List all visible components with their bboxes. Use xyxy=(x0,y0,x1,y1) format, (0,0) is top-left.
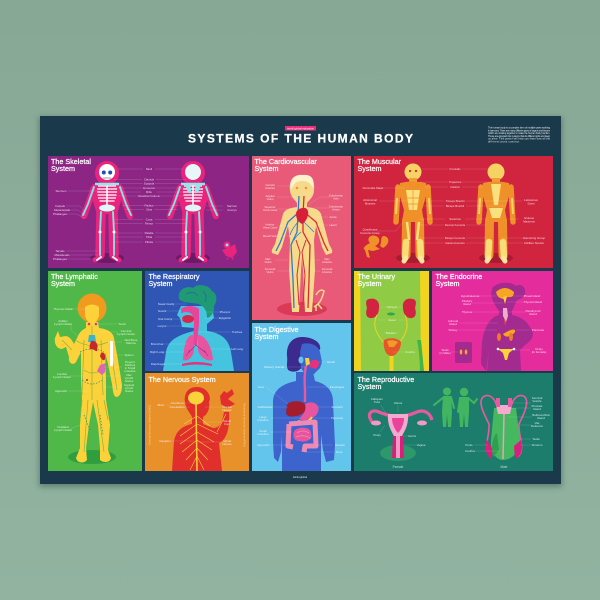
nervous leader lines xyxy=(166,403,222,442)
muscular labels: Latissimus xyxy=(524,198,538,202)
cardiovascular labels: Veins xyxy=(264,260,272,264)
cardiovascular labels: Inferior xyxy=(266,222,275,226)
muscular labels: Deltoid xyxy=(450,185,460,189)
reproductive labels: Female xyxy=(393,465,404,469)
lymphatic labels: Iliac xyxy=(126,373,132,377)
heading: respiratory: The Respiratory xyxy=(148,272,200,281)
skeletal labels: Fibula xyxy=(145,240,153,244)
endocrine labels xyxy=(439,294,546,355)
cardiovascular labels: Subclavian xyxy=(329,204,343,208)
reproductive labels: Gland xyxy=(533,407,541,411)
muscular labels: Femoris Group xyxy=(360,231,380,235)
cardiovascular labels: Artery xyxy=(332,208,340,212)
heading: urinary: The Urinary xyxy=(358,272,395,281)
nervous labels: Ganglion xyxy=(159,439,171,443)
heading: muscular: The Muscular xyxy=(358,157,401,166)
muscular leader lines xyxy=(377,169,523,243)
muscular labels: Abdominal xyxy=(363,198,377,202)
urinary labels xyxy=(386,305,415,354)
panel: muscular system xyxy=(354,156,553,268)
skeletal labels: Ribs xyxy=(146,190,152,194)
respiratory labels: Right Lung xyxy=(150,350,164,354)
lymphatic labels: Tonsil xyxy=(118,322,126,326)
heading: urinary: System xyxy=(358,279,381,288)
urinary labels: Bladder xyxy=(386,331,396,335)
skeletal labels: Radius xyxy=(144,204,154,208)
heading: digestive: The Digestive xyxy=(254,325,298,334)
intro paragraph: different parts connect. xyxy=(488,140,520,144)
endocrine labels: Thyroid Gland xyxy=(524,300,542,304)
lymphatic labels: in Small xyxy=(125,366,135,370)
reproductive labels: Tube xyxy=(374,400,381,404)
heading: cardiovascular: System xyxy=(254,164,278,173)
endocrine labels: Gland xyxy=(449,322,457,326)
lymphatic labels: Marrow xyxy=(126,341,137,345)
skeleton figures xyxy=(83,161,217,263)
lymphatic labels: Nodes xyxy=(125,389,134,393)
cardiovascular labels: Veins xyxy=(266,197,274,201)
lymphatic leader lines xyxy=(68,309,123,429)
heading: digestive: System xyxy=(254,332,278,341)
cardiovascular labels: Subclavian xyxy=(329,194,343,198)
lymphatic labels: Appendix xyxy=(55,389,68,393)
lymphatic labels: Spleen xyxy=(124,353,134,357)
muscular labels: Hamstring Group xyxy=(523,236,545,240)
skeletal labels: Phalanges xyxy=(53,212,67,216)
muscular labels: Frontalis xyxy=(449,167,461,171)
reproductive labels: Cervix xyxy=(408,434,417,438)
heading: skeletal: System xyxy=(51,164,75,173)
panel: endocrine system xyxy=(432,271,553,371)
lymphatic labels: Axillary xyxy=(58,319,68,323)
skeletal labels: Coccyx xyxy=(227,208,237,212)
figure: endocrine body xyxy=(481,283,533,371)
skeletal labels: Sternum xyxy=(56,189,67,193)
digestive labels: Salivary Glands xyxy=(264,365,285,369)
muscular labels: Sartorius xyxy=(449,217,461,221)
organs: kidneys and bladder xyxy=(366,299,416,356)
diagram: male reproductive organs xyxy=(481,395,527,460)
skeletal labels: Femur xyxy=(145,221,153,225)
digestive labels: Intestine xyxy=(258,418,269,422)
footer publisher note: twinkl.global xyxy=(293,475,307,479)
cardiovascular labels: Renal Vein xyxy=(263,234,277,238)
digestive labels: Small xyxy=(259,429,267,433)
muscular labels: Gastrocnemius xyxy=(445,241,465,245)
skeletal labels: Tarsals xyxy=(55,249,65,253)
reproductive labels: Scrotum xyxy=(532,443,543,447)
muscular labels: Trapezius xyxy=(449,180,462,184)
muscular labels xyxy=(360,167,545,245)
digestive leader lines xyxy=(266,362,333,452)
reproductive labels: Penis xyxy=(465,443,473,447)
respiratory labels: Diaphragm xyxy=(151,362,166,366)
cardiovascular labels: Aorta xyxy=(330,215,337,219)
skeletal labels: Sacrum xyxy=(227,204,238,208)
lymphatic labels: Peyer's xyxy=(125,360,135,364)
digestive labels: Mouth xyxy=(327,360,335,364)
lymphatic labels: Lymph Nodes xyxy=(53,375,71,379)
nervous labels: Cranial xyxy=(222,405,232,409)
urinary labels: Urethra xyxy=(405,350,415,354)
lymphatic labels: Lymph Nodes xyxy=(54,322,72,326)
endocrine leader lines xyxy=(451,296,530,352)
endocrine labels: (in Female) xyxy=(532,350,546,354)
cardiovascular labels: Femoral xyxy=(265,267,276,271)
reproductive labels: Fallopian xyxy=(371,397,383,401)
muscular labels: Biceps Femoris xyxy=(445,236,466,240)
figure: body with vessels xyxy=(272,175,332,316)
lymphatic labels xyxy=(53,307,138,432)
respiratory labels: Pharynx xyxy=(220,310,231,314)
digestive labels: Rectum xyxy=(335,443,346,447)
muscular labels: Muscles xyxy=(365,202,376,206)
icon: red dragon on hand xyxy=(220,389,235,408)
skeletal labels: Clavicle xyxy=(144,178,154,182)
figure: respiratory torso xyxy=(163,285,234,371)
respiratory labels: Nostril xyxy=(158,309,166,313)
skeletal labels: Ulna xyxy=(146,208,152,212)
nervous labels: Spinal xyxy=(223,439,231,443)
heading: skeletal: The Skeletal xyxy=(51,157,91,166)
reproductive labels xyxy=(371,396,550,469)
icon: dragon skeleton figure xyxy=(314,290,324,311)
panel: urinary system xyxy=(354,271,429,371)
muscular labels: Dorsi xyxy=(528,202,535,206)
heading: nervous: The Nervous System xyxy=(148,375,216,384)
skeletal labels: Coxa xyxy=(146,218,153,222)
panel: digestive system xyxy=(252,323,351,471)
nervous labels: Cerebrum xyxy=(171,401,184,405)
cardiovascular labels: Superior xyxy=(265,205,275,209)
endocrine labels: Thymus xyxy=(462,310,473,314)
endocrine labels: Parathyroid xyxy=(526,309,541,313)
heading: endocrine: The Endocrine xyxy=(436,272,482,281)
lymphatic labels: Thymus Gland xyxy=(54,307,73,311)
cardiovascular labels xyxy=(263,183,343,274)
skeletal labels: Metacarpals xyxy=(54,208,70,212)
skeletal labels: Scapula xyxy=(144,182,155,186)
muscular labels: Achilles Tendon xyxy=(524,241,544,245)
figure: nervous system xyxy=(172,387,229,471)
respiratory labels: Trachea xyxy=(232,330,243,334)
cardiovascular labels: Iliac xyxy=(324,257,330,261)
intro paragraph: The human body is a complex form of multiple parts working xyxy=(488,126,551,130)
skeletal labels: Vertebral Column xyxy=(138,194,161,198)
reproductive labels: Urethra xyxy=(465,449,475,453)
skeletal leader lines xyxy=(66,169,223,259)
muscular labels: Biceps Brachii xyxy=(446,204,465,208)
intro paragraph: in harmony. There are many different types of organs and tissues xyxy=(488,129,551,132)
heading: endocrine: System xyxy=(436,279,459,288)
reproductive labels: Ovary xyxy=(373,433,381,437)
publisher tag: twinkl.global.education xyxy=(287,126,315,130)
nervous labels: Nerves xyxy=(222,408,232,412)
digestive labels: Stomach xyxy=(331,405,343,409)
endocrine labels: Testis xyxy=(441,348,449,352)
endocrine labels: (in Male) xyxy=(439,351,451,355)
poster shadow xyxy=(39,117,562,487)
reproductive leader lines xyxy=(380,403,532,451)
heading: reproductive: System xyxy=(358,382,381,391)
respiratory labels: Oral Cavity xyxy=(158,317,173,321)
reproductive labels: Vagina xyxy=(417,443,426,447)
respiratory labels: Epiglottis xyxy=(219,316,231,320)
skeletal labels: Skull xyxy=(146,167,152,171)
skeletal labels: Phalanges xyxy=(53,257,67,261)
cardiovascular labels: Vena Cava xyxy=(263,208,277,212)
title: SYSTEMS OF THE HUMAN BODY xyxy=(188,132,413,146)
poster board xyxy=(40,116,561,484)
reproductive labels: Male xyxy=(501,465,508,469)
cardiovascular labels: Femoral xyxy=(322,267,333,271)
skeletal labels: Humerus xyxy=(143,186,155,190)
cardiovascular labels: Vein xyxy=(333,196,339,200)
icon: bird skeleton xyxy=(222,242,237,260)
nervous labels: Nerves xyxy=(222,442,232,446)
diagram: female reproductive organs xyxy=(370,411,432,461)
skeletal labels: Patella xyxy=(145,231,154,235)
panel: reproductive system xyxy=(354,373,553,471)
lymphatic labels: Inguinal xyxy=(124,383,134,387)
nervous labels: Cerebellum xyxy=(170,405,185,409)
digestive labels: Intestine xyxy=(258,432,269,436)
digestive labels xyxy=(257,360,346,454)
digestive labels: Liver xyxy=(258,385,264,389)
intro paragraph: us alive. This poster will help you learn how all the xyxy=(488,138,551,141)
endocrine labels: Gland xyxy=(529,312,537,316)
respiratory labels: Bronchus xyxy=(151,342,164,346)
digestive labels: Esophagus xyxy=(330,385,345,389)
digestive labels: Gallbladder xyxy=(258,405,272,409)
reproductive labels: Seminal xyxy=(532,396,543,400)
cardiovascular labels: Vena Cava xyxy=(263,226,277,230)
skeletal labels: Carpals xyxy=(55,204,66,208)
cardiovascular labels: Arteries xyxy=(265,186,276,190)
cardiovascular labels: Arteries xyxy=(322,270,333,274)
heading: respiratory: System xyxy=(148,279,172,288)
endocrine labels: Kidney xyxy=(449,328,458,332)
cardiovascular labels: Carotid xyxy=(265,183,275,187)
nervous labels: Brain xyxy=(158,403,165,407)
nervous labels: Cord xyxy=(224,422,231,426)
reproductive labels: Uterus xyxy=(394,401,403,405)
endocrine labels: Adrenal xyxy=(448,319,458,323)
inset: male testes xyxy=(455,342,472,363)
icons: two green figures xyxy=(434,388,477,427)
panel: skeletal system xyxy=(48,156,249,268)
endocrine labels: Pituitary xyxy=(462,299,473,303)
reproductive labels: Gland xyxy=(537,416,545,420)
heading: muscular: System xyxy=(358,164,381,173)
heading: reproductive: The Reproductive xyxy=(358,375,414,384)
urinary labels: Ureter xyxy=(388,318,396,322)
lymphatic labels: Intestine xyxy=(125,369,136,373)
intro paragraph: which are working together to make the human body function. xyxy=(488,132,550,135)
lymphatic labels: Lymph xyxy=(125,376,134,380)
icon: muscular squirrel xyxy=(364,236,388,258)
publisher tag xyxy=(285,126,316,130)
lymphatic labels: Red Bone xyxy=(125,338,138,342)
figure: body with lymph nodes xyxy=(55,294,122,464)
cardiovascular leader lines xyxy=(275,186,330,271)
nervous labels: Central Nervous System (CNS) xyxy=(148,405,152,445)
endocrine labels: Pineal Gland xyxy=(524,294,541,298)
nervous labels xyxy=(148,401,246,447)
lymphatic labels: Nodes xyxy=(125,379,134,383)
respiratory labels xyxy=(150,302,243,366)
panel: nervous system xyxy=(145,373,249,471)
respiratory leader lines xyxy=(162,304,231,364)
heading: lymphatic: System xyxy=(51,279,75,288)
muscular labels: Maximus xyxy=(523,220,535,224)
reproductive labels: Prostate xyxy=(532,404,543,408)
muscle figures xyxy=(396,164,513,263)
lymphatic labels: Lymph Nodes xyxy=(54,428,72,432)
endocrine labels: Pancreas xyxy=(532,328,545,332)
panel: lymphatic system xyxy=(48,271,142,471)
lymphatic labels: Lymph xyxy=(125,386,134,390)
lymphatic labels: Lymph Nodes xyxy=(117,332,135,336)
cardiovascular labels: Iliac xyxy=(265,257,271,261)
digestive labels: Large xyxy=(259,415,267,419)
respiratory labels: Larynx xyxy=(158,324,167,328)
figure: digestive body xyxy=(273,337,335,471)
endocrine labels: Gland xyxy=(463,302,471,306)
cardiovascular labels: Veins xyxy=(266,270,274,274)
nervous labels: Spinal xyxy=(223,419,231,423)
lymphatic labels: Patches xyxy=(125,363,136,367)
urinary labels: Kidneys xyxy=(387,305,398,309)
intro paragraph xyxy=(488,126,551,144)
endocrine labels: Hypothalamus xyxy=(461,294,480,298)
urinary leader lines xyxy=(378,307,404,352)
muscular labels: Quadriceps xyxy=(363,228,378,232)
skeletal labels: Tibia xyxy=(146,235,152,239)
cardiovascular labels: Heart xyxy=(329,223,337,227)
panel: cardiovascular system xyxy=(252,156,351,320)
endocrine labels: Ovary xyxy=(535,347,543,351)
muscular labels: Rectus Femoris xyxy=(445,223,466,227)
reproductive labels: Deferens xyxy=(531,424,543,428)
reproductive labels: Vesicle xyxy=(532,399,542,403)
lymphatic labels: Cervical xyxy=(121,329,132,333)
panel: respiratory system xyxy=(145,271,249,371)
muscular labels: Pectoralis Major xyxy=(363,186,383,190)
reproductive labels: Bulbourethral xyxy=(532,413,550,417)
reproductive labels: Testis xyxy=(532,437,540,441)
lymphatic labels: Lumbar xyxy=(57,372,67,376)
nervous labels: Peripheral Nervous System (PNS) xyxy=(242,403,246,447)
digestive labels: Anus xyxy=(336,450,343,454)
skeletal labels: Metatarsals xyxy=(55,253,70,257)
cardiovascular labels: Arteries xyxy=(322,260,333,264)
skeletal labels xyxy=(53,167,238,261)
muscular labels: Gluteus xyxy=(524,216,535,220)
respiratory labels: Left Lung xyxy=(231,347,243,351)
digestive labels: Appendix xyxy=(257,443,270,447)
respiratory labels: Nasal Cavity xyxy=(158,302,175,306)
heading: lymphatic: The Lymphatic xyxy=(51,272,98,281)
cardiovascular labels: Jugular xyxy=(265,194,275,198)
reproductive labels: Vas xyxy=(535,421,540,425)
muscular labels: Triceps Brachii xyxy=(445,199,465,203)
intro paragraph: These are grouped into systems that do different jobs and keep xyxy=(488,135,551,138)
lymphatic labels: Popliteal xyxy=(57,425,69,429)
heading: cardiovascular: The Cardiovascular xyxy=(254,157,317,166)
digestive labels: Pancreas xyxy=(331,416,344,420)
